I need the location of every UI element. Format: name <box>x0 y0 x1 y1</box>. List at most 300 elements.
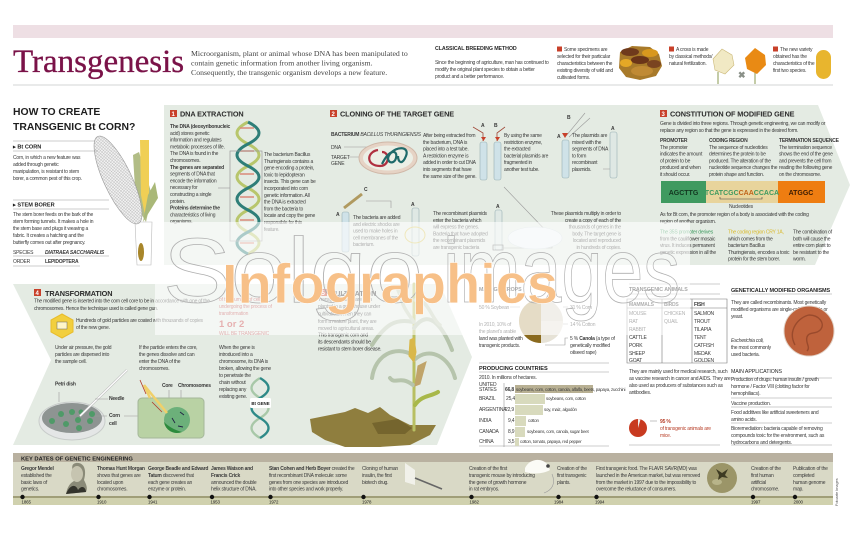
classical breeding heading: CLASSICAL BREEDING METHOD <box>435 46 517 52</box>
multiplication text: in hundreds of copies. <box>576 245 621 251</box>
classical breeding text: Since the beginning of agriculture, man has continued to <box>435 60 549 66</box>
shock text: cell membranes of the <box>353 235 398 241</box>
applications list: hemophiliacs). <box>731 391 760 397</box>
illustration: DNA with Bt gene <box>250 378 271 438</box>
section: stem borer: stem forming tunnels. It makes a hole in <box>13 219 94 225</box>
animals table: FISH <box>694 302 705 308</box>
coding region column: The sequence of nucleotides <box>709 145 768 151</box>
termination sequence column: and prevents the cell from <box>779 158 831 164</box>
timeline events: Creation of the <box>751 466 781 472</box>
timeline events <box>21 466 828 492</box>
step 3 text <box>773 46 815 74</box>
heading: TRANSFORMATION <box>45 289 112 298</box>
animals table: BIRDS <box>664 302 679 308</box>
shock text: The bacteria are added <box>353 215 401 221</box>
timeline events: first recombinant DNA molecule: some <box>269 473 347 479</box>
animals table: RAT <box>629 319 638 325</box>
shock text: and electric shocks are <box>353 222 400 228</box>
crops note: transgenic products. <box>479 343 520 349</box>
badge 3 <box>660 110 667 118</box>
timeline events: enzyme or protein. <box>148 486 186 492</box>
illustration: petri dish: Corn <box>109 413 120 419</box>
coding note: Thuringiensis, encodes a toxic <box>728 250 790 256</box>
panel: transformation <box>34 289 273 440</box>
applications list: compounds toxic for the environment, such as <box>731 433 825 439</box>
illustration: corn cell: Core <box>162 383 173 389</box>
promoter note: from the cauliflower mosaic <box>660 236 716 242</box>
timeline events: Francis Crick <box>211 473 241 479</box>
icon: seeds <box>619 46 662 80</box>
section: stem borer: The stem borer feeds on the bark of the <box>13 212 93 218</box>
multiplication text: create a copy of each of the <box>565 218 621 224</box>
panel: key dates timeline <box>13 453 833 505</box>
core text: enter the DNA of the <box>139 359 181 365</box>
extraction text: the bacterium, DNA is <box>423 140 468 146</box>
bar chart: 66,8 <box>505 387 514 393</box>
bacterium text: Thuringiensis contains a <box>264 159 314 165</box>
gold particles text: of the new gene. <box>76 325 110 331</box>
shock text: bacterium. <box>353 242 374 248</box>
timeline dots <box>20 495 797 499</box>
applications list: Production of drugs: human insulin / growth <box>731 377 819 383</box>
timeline events: insulin, the first <box>362 473 393 479</box>
coding note: The coding region CRY 1A, <box>728 230 784 236</box>
promoter column: PROMOTER <box>660 138 688 144</box>
bar chart: CHINA <box>479 439 494 445</box>
step 1 text: existing diversity of wild and <box>557 68 613 74</box>
intro text: Microorganism, plant or animal whose DNA has been manipulated to <box>191 49 408 58</box>
top pink band <box>13 25 833 38</box>
restriction text: restriction enzyme, <box>504 140 542 146</box>
extraction text: added in order to cut DNA <box>423 160 477 166</box>
badge 5: 5 <box>322 291 326 297</box>
timeline events: helix structure of DNA. <box>211 486 256 492</box>
bar chart: STATES <box>479 387 497 393</box>
recombinant text: enter the bacteria which <box>433 218 482 224</box>
uses text: They are mainly used for medical research, such <box>629 369 728 375</box>
core text: chromosomes. <box>139 366 169 372</box>
DNA and target gene labels: TARGET <box>331 155 350 161</box>
crops note: land was planted with <box>479 336 523 342</box>
transgenic cells statistic <box>219 297 273 337</box>
syringe <box>405 463 442 489</box>
cultivation text: moved to agricultural areas. <box>318 326 374 332</box>
step 3 text: obtained has the <box>773 54 807 60</box>
section: Bt corn: Corn, in which a new feature was <box>13 155 81 161</box>
bar chart: 3,5 <box>508 439 515 445</box>
mixing tubes <box>557 113 617 178</box>
timeline events: overcome the reluctance of consumers. <box>596 486 676 492</box>
gene sequence bar: TCATCGCCAACCACA <box>705 190 779 197</box>
badge 2 <box>330 110 337 118</box>
extraction text: the same size of the gene. <box>423 174 476 180</box>
bar chart: ARGENTINA <box>479 407 507 413</box>
DNA helix illustration <box>218 122 262 254</box>
bacterium text: responsible for this <box>264 220 303 226</box>
step 2 text <box>669 46 713 67</box>
illustration: corn cell <box>124 380 211 438</box>
pie chart <box>519 299 563 343</box>
portrait: Gregor Mendel <box>66 463 87 494</box>
badge 1 <box>170 110 177 118</box>
timeline events: Creation of the <box>557 466 587 472</box>
section: Bt corn: borer, a common pest of this crop. <box>13 176 82 182</box>
DNA text: encode the information <box>170 178 217 184</box>
section: stem borer: ▸ STEM BORER <box>12 202 55 208</box>
watermark: Infographics: Infographics <box>222 252 558 315</box>
animals table: PORK <box>629 343 643 349</box>
Bt corn text: As for Bt corn, the promoter region of a body is associated with the coding <box>660 212 809 218</box>
timeline events: established the <box>21 473 52 479</box>
animals table: GOAT <box>629 358 642 364</box>
bar chart: cotton, tomato, papaya, red pepper <box>520 439 582 444</box>
animals table: CATFISH <box>694 343 714 349</box>
promoter column: indicates the amount <box>660 152 703 158</box>
timeline years: 1865 <box>22 500 32 504</box>
panel: how to create Bt corn <box>12 107 158 266</box>
timeline events: transgenic mouse by introducing <box>469 473 535 479</box>
timeline events: chromosome. <box>751 486 779 492</box>
air pressure text: particles are dispersed into <box>55 352 110 358</box>
air pressure text: Under air pressure, the gold <box>55 345 112 351</box>
multiplication text: These plasmids multiply in order to <box>551 211 621 217</box>
uses text: antibodies. <box>629 390 651 396</box>
pie labels: 31 % Corn <box>570 305 592 311</box>
bar chart: soy, maiz, algodón <box>544 407 577 412</box>
chromosome text: to penetrate the <box>219 373 251 379</box>
mixing text: plasmids. <box>572 167 591 173</box>
applications heading: MAIN APPLICATIONS <box>731 369 782 375</box>
timeline events: human genome <box>793 480 826 486</box>
pipette and tube C: C <box>364 187 368 193</box>
transgenic cells statistic: of the number of cells <box>219 297 263 303</box>
pie labels: genetically modified <box>570 343 610 349</box>
heading: CULTIVATION <box>330 289 376 298</box>
section: stem borer: fabric. It creates a hatching and the <box>13 233 84 239</box>
step 1 text: Some specimens are <box>564 47 608 53</box>
DNA text: metabolic processes of life. <box>170 144 225 150</box>
timeline events: genetics. <box>21 486 39 492</box>
timeline events: first human <box>751 473 774 479</box>
intro text: contain genetic information from another living organism. <box>191 58 373 68</box>
bacterium text: incorporated into corn <box>264 186 308 192</box>
timeline events: Thomas Hunt Morgan <box>97 466 145 472</box>
timeline events: basic laws of <box>21 480 48 486</box>
illustration: soil <box>310 407 436 447</box>
chromosome text: broken, allowing the gene <box>219 366 271 372</box>
cultivation text: form a mature plant, they are <box>318 319 377 325</box>
illustration: petri dish: Needle <box>109 396 125 402</box>
chromosome text: chromosome, its DNA is <box>219 359 269 365</box>
applications list: amino acids. <box>731 417 757 423</box>
multiplication text: thousands of genes in the <box>569 225 621 231</box>
applications list: Food additives like artificial sweeteners and <box>731 410 819 416</box>
heading: TRANSGENIC ANIMALS <box>629 287 688 293</box>
timeline years: 1982 <box>470 500 480 504</box>
timeline years: 1984 <box>554 500 564 504</box>
timeline events: plants. <box>557 480 570 486</box>
applications list: hydrocarbons and detergents. <box>731 440 792 446</box>
badge 4 <box>34 289 41 297</box>
termination sequence column: reading the following gene <box>779 165 833 171</box>
extraction text: into segments that have <box>423 167 472 173</box>
DNA text: Proteins determine the <box>170 206 220 212</box>
bar chart: soybeans, corn, cotton <box>546 396 587 401</box>
recombinant text: are transgenic bacteria <box>433 245 480 251</box>
step 2 text: by classical methods/ <box>669 54 713 60</box>
illustration: petri dish: cell <box>109 421 117 427</box>
illustration: petri dish <box>39 370 127 440</box>
test tubes A and B <box>473 123 505 180</box>
unit note: 2010. In millions of hectares. <box>479 375 537 381</box>
core text: the genes dissolve and can <box>139 352 195 358</box>
mixing text: mixed with the <box>572 140 602 146</box>
shock text: used to make holes in <box>353 229 398 235</box>
classical breeding text: modify the original plant species to obtain a better <box>435 67 535 73</box>
timeline events: genes from one species are introduced <box>269 480 348 486</box>
test tubes A and B: B <box>494 123 498 129</box>
image credit: Fotoarte Images <box>835 478 839 506</box>
bacterium text: The bacterium Bacillus <box>264 152 311 158</box>
illustration: corn cell: Chromosomes <box>178 383 211 389</box>
promoter note: virus. It induces permanent <box>660 243 715 249</box>
applications list: Vaccine production. <box>731 401 771 407</box>
bar chart: 9,4 <box>508 418 515 424</box>
step 2 text: A cross is made <box>676 47 709 53</box>
intro text: The modified gene is inserted into the corn cell core to be in accordance with one of the <box>34 298 210 304</box>
timeline years: 1972 <box>269 500 279 504</box>
bacterium text: from the bacteria to <box>264 206 303 212</box>
bar chart <box>479 382 625 446</box>
timeline events: located upon <box>97 480 124 486</box>
badge 3: 3 <box>662 112 666 118</box>
bar chart: soybeans, corn, cotton, canola, alfalfa, beets, papaya, zucchini <box>516 387 625 392</box>
pie labels: 5 % Canola (a type of <box>570 336 615 342</box>
section: stem borer: ORDER <box>13 259 31 265</box>
badge 4: 4 <box>36 291 40 297</box>
section: Bt corn: added through genetic <box>13 162 59 168</box>
animals table: TROUT <box>694 319 710 325</box>
animals table: GOLDEN <box>694 358 715 364</box>
step 1 text: cultivated forms. <box>557 75 590 81</box>
mixing text: The plasmids are <box>572 133 608 139</box>
organisms text: They are called recombinants. Most genetically <box>731 300 827 306</box>
section: stem borer: DIATRAEA SACCHARALIS <box>45 250 105 256</box>
timeline events: Stan Cohen and Herb Boyer created the <box>269 466 354 472</box>
mixing tubes: B <box>567 115 571 121</box>
DNA text: protein. <box>170 199 185 205</box>
timeline events: announced the double <box>211 480 257 486</box>
illustration: DNA with Bt gene: Bt GENE <box>251 401 270 406</box>
recombinant text: Bacteria that have adopted <box>433 231 488 237</box>
uses text: also used as producers of substances such as <box>629 383 723 389</box>
badge 5 <box>320 289 327 297</box>
icon: new seed <box>816 50 831 79</box>
icon: flowers crossing: ✖ <box>738 70 746 80</box>
intro text: chromosomes. Hence the technique used is called gene gun. <box>34 306 158 312</box>
timeline years: 2000 <box>794 500 804 504</box>
icon: gold particles <box>51 314 73 338</box>
transgenic cells statistic: WILL BE TRANSGENIC <box>219 331 270 337</box>
multiplication text: located and reproduced <box>573 238 621 244</box>
promoter note: The 35S promoter derives <box>660 230 714 236</box>
DNA and target gene labels: DNA <box>331 145 342 151</box>
crops note: the planet's arable <box>479 329 516 335</box>
timeline events: artificial <box>751 480 766 486</box>
cultivation text: Transgenic plants are then <box>318 297 372 303</box>
uses text: as vaccine research in cancer and AIDS. They are <box>629 376 731 382</box>
promoter column: The promoter <box>660 145 688 151</box>
heading: DNA EXTRACTION <box>180 110 244 118</box>
step 1 text: characteristics between the <box>557 61 613 67</box>
chromosome text: chain without <box>219 380 246 386</box>
step 3 text: first two species. <box>773 68 806 74</box>
panel: transgenic crops <box>479 287 616 356</box>
test tubes A and B: A <box>481 123 485 129</box>
section: stem borer: butterfly comes out after pregnancy. <box>13 240 85 246</box>
timeline years: 1997 <box>751 500 761 504</box>
timeline events: George Beadle and Edward <box>148 466 208 472</box>
tomato <box>707 463 737 493</box>
bacterium text: toxic to lepidopteran <box>264 172 305 178</box>
test tube and petri dish <box>493 187 562 250</box>
gold particles text: Hundreds of gold particles are coated with thousands of copies <box>76 318 204 324</box>
section: Bt corn: ▸ Bt CORN <box>12 144 41 150</box>
icon: bacteria culture <box>784 306 834 356</box>
timeline years: 1994 <box>595 500 605 504</box>
animals table: MOUSE <box>629 311 647 317</box>
step 3 text: characteristics of the <box>773 61 815 67</box>
timeline events: each gene creates an <box>148 480 193 486</box>
coding region column: nucleotide sequence changes the <box>709 165 778 171</box>
panel: lower process background <box>13 284 472 445</box>
test tube and petri dish: A <box>496 204 500 210</box>
Bt corn text: region of another organism. <box>660 219 716 225</box>
test tube with cell <box>405 202 425 256</box>
mice pie chart <box>629 419 657 437</box>
coding note: protein for the stem borer. <box>728 257 780 263</box>
combination note: entire corn plant to <box>793 243 831 249</box>
mice statistic: 95 % <box>660 419 671 425</box>
bar chart: UNITED <box>479 382 497 388</box>
bar chart: 25,4 <box>506 396 515 402</box>
animals table: CATTLE <box>629 335 647 341</box>
coding region column: CODING REGION <box>709 138 748 144</box>
extraction text: After being extracted from <box>423 133 475 139</box>
bacterium text: insects. This gene can be <box>264 179 316 185</box>
E. coli note: the most commonly <box>731 345 772 351</box>
promoter note: genetic expression in all the <box>660 250 716 256</box>
restriction text: bacterial plasmids are <box>504 153 549 159</box>
promoter column: produced and when <box>660 165 701 171</box>
heading: CONSTITUTION OF MODIFIED GENE <box>670 110 795 118</box>
animals table: MEDAK <box>694 351 712 357</box>
timeline years: 1910 <box>97 500 107 504</box>
panel: transgenic animals <box>627 284 731 445</box>
animals table: QUAIL <box>664 319 678 325</box>
animals table: SHEEP <box>629 351 646 357</box>
watermark veil <box>155 222 690 335</box>
panel: constitution of modified gene <box>660 110 840 263</box>
animals table: MAMMALS <box>629 302 655 308</box>
transgenic cells statistic: transformation <box>219 311 249 317</box>
termination sequence column: TERMINATION SEQUENCE <box>779 138 840 144</box>
step 3 text: The new variety <box>780 47 813 53</box>
bar chart: 8,9 <box>508 429 515 435</box>
timeline events: biotech drug. <box>362 480 388 486</box>
gene sequence bar: ATGGC <box>789 190 813 197</box>
illustration: corn plant <box>372 284 455 430</box>
restriction text: another test tube. <box>504 167 539 173</box>
timeline events: from the market in 1997 due to the impossibility to <box>596 480 697 486</box>
animals table <box>627 299 727 364</box>
DNA text: acid) stores genetic <box>170 131 210 137</box>
combination note: both will cause the <box>793 236 831 242</box>
mixing text: to form <box>572 153 586 159</box>
cultivation text: planted in a greenhouse under <box>318 304 381 310</box>
mixing text: recombinant <box>572 160 598 166</box>
pipette and tube C: A <box>336 212 340 218</box>
timeline events: Cloning of human <box>362 466 398 472</box>
pie labels: 50 % Soybean <box>479 305 510 311</box>
timeline events: map. <box>793 486 803 492</box>
timeline years: 1953 <box>210 500 221 504</box>
coding note: bacterium Bacillus <box>728 243 766 249</box>
organisms text: modified organisms are single-celled bacteria or <box>731 307 828 313</box>
step 2 text: natural fertilization. <box>669 61 707 67</box>
cultivation text: resistant to stem borer disease. <box>318 346 381 352</box>
main heading: TRANSGENIC Bt CORN? <box>13 122 135 133</box>
timeline events: Publication of the <box>793 466 828 472</box>
coding region column: determines the protein to be <box>709 152 766 158</box>
DNA text: organisms. <box>170 219 192 225</box>
timeline events: shows that genes are <box>97 473 141 479</box>
main heading: HOW TO CREATE <box>13 107 100 118</box>
DNA text: The genes are separated <box>170 165 224 171</box>
heading: MAIN GM CROPS <box>479 287 522 293</box>
mixing tubes: A <box>557 134 561 140</box>
panel: classical breeding method <box>435 46 831 84</box>
intro text: Gene is divided into three regions. Through genetic engineering, we can modify or <box>660 121 826 127</box>
E. coli note: Escherichia coli, <box>731 338 764 344</box>
timeline events: James Watson and <box>211 466 253 472</box>
badge 2: 2 <box>332 112 336 118</box>
mouse <box>525 460 554 493</box>
timeline events: completed <box>793 473 815 479</box>
cultivation text: This transgenic corn and <box>318 332 368 338</box>
section: stem borer: LEPIDOPTERA <box>45 259 79 265</box>
mixing text: segments of DNA <box>572 147 609 153</box>
DNA text: constructing a single <box>170 192 212 198</box>
timeline years: 1941 <box>148 500 158 504</box>
combination note: The combination of <box>793 230 833 236</box>
DNA text: information and regulates <box>170 138 222 144</box>
termination sequence column: The termination sequence <box>779 145 832 151</box>
timeline events: Creation of the first <box>469 466 508 472</box>
panel: cloning of the target gene <box>330 110 622 256</box>
intro text: Consequently, the transgenic organism develops a new feature. <box>191 68 387 77</box>
bacterium text: the DNA is extracted <box>264 200 306 206</box>
bacterium label: BACTERIUM BACILLUS THURINGIENSIS <box>331 132 422 138</box>
classical breeding text: product and a better performance. <box>435 74 504 80</box>
DNA text: The DNA is found in the <box>170 151 219 157</box>
animals table: TILAPIA <box>694 327 712 333</box>
restriction text: By using the same <box>504 133 542 139</box>
icon: flowers crossing <box>713 48 766 84</box>
watermark: outlined text <box>163 220 680 322</box>
timeline events: into other species and work properly. <box>269 486 343 492</box>
chromosome text: When the gene is <box>219 345 255 351</box>
